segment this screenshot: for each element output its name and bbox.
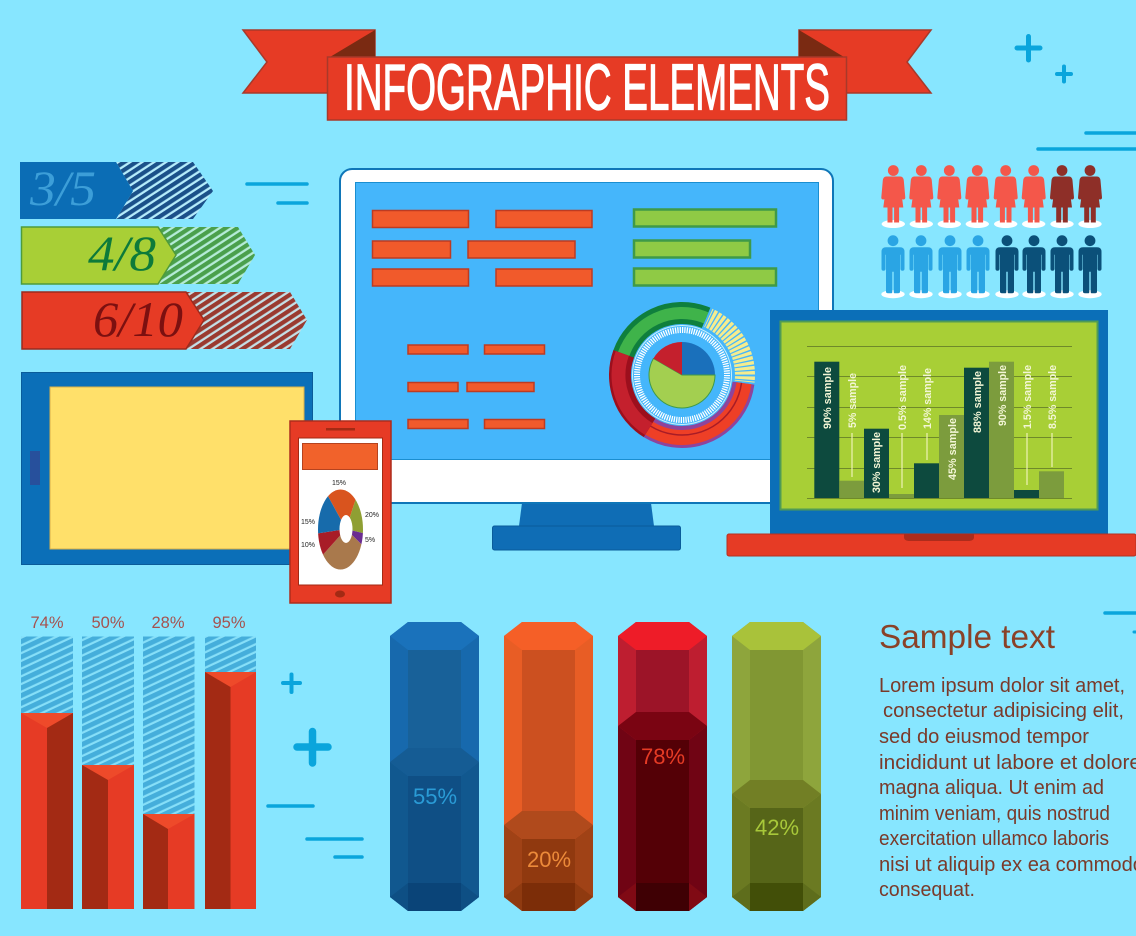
phone chart labels: 10% <box>301 542 315 549</box>
hex column: 78%: 78% <box>641 744 685 769</box>
laptop <box>727 310 1136 556</box>
sample text body: exercitation ullamco laboris <box>879 828 1109 850</box>
smartphone <box>290 421 391 603</box>
title ribbon <box>243 30 931 124</box>
fraction tag: 6/10 <box>22 291 307 349</box>
laptop bar chart: 90% sample <box>997 365 1009 426</box>
laptop bar chart: 88% sample <box>972 371 984 433</box>
laptop bar chart <box>807 346 1072 498</box>
sample text body: sed do eiusmod tempor <box>879 726 1089 748</box>
bar 74% <box>21 713 73 909</box>
sample text body: Lorem ipsum dolor sit amet, <box>879 675 1125 697</box>
hex column: 55%: 55% <box>413 784 457 809</box>
bar 28% <box>143 814 194 909</box>
fraction tag: 3/5: 3/5 <box>29 160 96 216</box>
bar 50% <box>82 765 134 909</box>
hex column: 20%: 20% <box>527 847 571 872</box>
bar 95% <box>205 672 256 909</box>
decorative plus and dash marks <box>247 36 1136 857</box>
fraction tag: 4/8 <box>22 225 255 284</box>
laptop bar chart: 14% sample <box>922 368 934 429</box>
laptop bar chart: 0.5% sample <box>897 365 909 430</box>
bar labels: 95% <box>212 614 246 632</box>
bar labels: 50% <box>91 614 125 632</box>
tablet button <box>30 451 40 485</box>
laptop bar chart: 8.5% sample <box>1047 365 1059 429</box>
sample text body: minim veniam, quis nostrud <box>879 803 1110 825</box>
orange text bars <box>372 210 592 428</box>
fraction tag: 3/5 <box>20 160 213 219</box>
bar labels <box>30 614 246 632</box>
sample text body: nisi ut aliquip ex ea commodo <box>879 854 1136 876</box>
laptop bar chart: 45% sample <box>947 418 959 480</box>
laptop bar chart: 1.5% sample <box>1022 365 1034 429</box>
sample text body: incididunt ut labore et dolore <box>879 752 1136 774</box>
laptop bar chart: 30% sample <box>871 432 883 493</box>
sample text body <box>879 675 1136 901</box>
radial chart <box>609 302 755 448</box>
hex column: 55% <box>390 622 479 911</box>
phone donut chart <box>318 490 363 570</box>
phone chart labels: 15% <box>332 480 346 487</box>
fraction tag: 6/10: 6/10 <box>93 291 183 347</box>
hex column: 78% <box>618 622 707 911</box>
pictogram: men <box>881 235 1102 298</box>
phone chart labels: 5% <box>365 537 375 544</box>
hex column: 42% <box>732 622 821 911</box>
sample text heading: Sample text <box>879 618 1055 655</box>
hex column: 42%: 42% <box>755 815 799 840</box>
bar labels: 28% <box>151 614 185 632</box>
hex column: 20% <box>504 622 593 911</box>
phone chart labels: 20% <box>365 512 379 519</box>
bar labels: 74% <box>30 614 64 632</box>
tablet <box>22 372 312 564</box>
laptop bar chart: 90% sample <box>822 367 834 429</box>
3D bar chart <box>21 614 256 909</box>
laptop bar chart: 5% sample <box>847 373 859 428</box>
sample text body: consectetur adipisicing elit, <box>883 700 1124 722</box>
phone chart labels <box>301 480 379 549</box>
phone chart labels: 15% <box>301 519 315 526</box>
pictogram: women <box>881 165 1102 228</box>
desktop monitor <box>340 169 833 550</box>
sample text body: consequat. <box>879 879 975 901</box>
sample text body: magna aliqua. Ut enim ad <box>879 777 1104 799</box>
green text bars <box>634 210 776 286</box>
fraction tag: 4/8: 4/8 <box>88 225 156 281</box>
